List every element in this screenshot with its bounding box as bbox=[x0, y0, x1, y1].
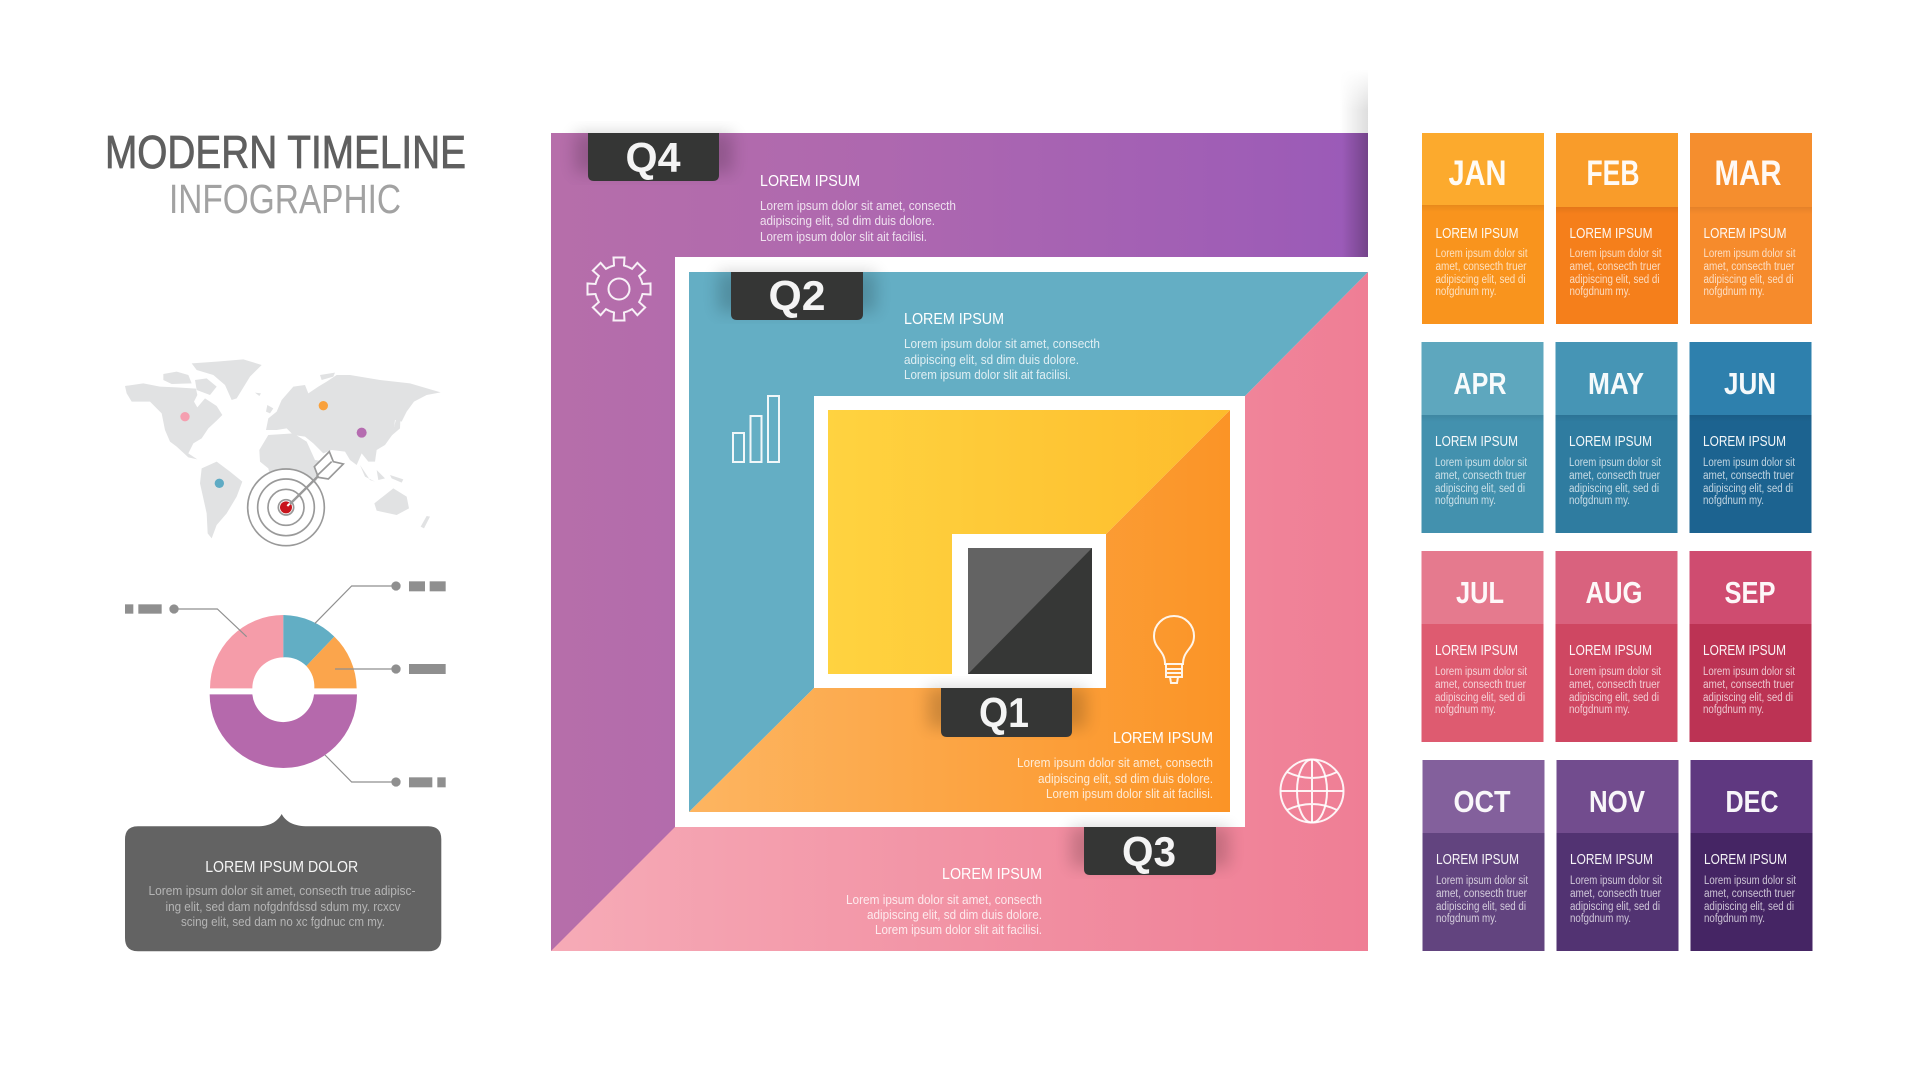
icon: light bulb bbox=[1154, 616, 1194, 683]
card: MAR bbox=[1690, 133, 1812, 324]
card: JAN: adipiscing elit, sed di bbox=[1436, 274, 1526, 286]
text: Q1: LOREM IPSUM bbox=[1113, 730, 1213, 747]
card: OCT bbox=[1422, 760, 1544, 951]
card: JUN: Lorem ipsum dolor sit bbox=[1703, 457, 1796, 469]
label: Q2: Q2 bbox=[768, 272, 826, 319]
text: Q2 bbox=[904, 311, 1100, 382]
card: MAR: Lorem ipsum dolor sit bbox=[1704, 248, 1796, 260]
card: JUL: Lorem ipsum dolor sit bbox=[1435, 666, 1528, 678]
label: Q1 bbox=[928, 688, 1086, 737]
card: OCT: nofgdnum my. bbox=[1436, 913, 1497, 925]
card: SEP: LOREM IPSUM bbox=[1703, 643, 1786, 659]
card: MAR: MAR bbox=[1714, 154, 1782, 193]
card: OCT: adipiscing elit, sed di bbox=[1436, 901, 1526, 913]
card: JAN bbox=[1422, 133, 1544, 324]
text: Q1: Lorem ipsum dolor slit ait facilisi. bbox=[1046, 786, 1213, 801]
callout box bbox=[125, 814, 441, 951]
text: Q3: Lorem ipsum dolor sit amet, consecth bbox=[846, 892, 1042, 907]
label: Q1: Q1 bbox=[979, 689, 1029, 736]
callout box: LOREM IPSUM DOLOR bbox=[205, 859, 358, 876]
center dark square bbox=[968, 548, 1092, 674]
donut chart with leader lines bbox=[125, 581, 446, 787]
label: Q4 bbox=[575, 133, 733, 181]
card: FEB: nofgdnum my. bbox=[1570, 286, 1630, 298]
card: JAN: Lorem ipsum dolor sit bbox=[1436, 248, 1528, 260]
segment: purple bbox=[210, 694, 357, 768]
card: JAN: amet, consecth truer bbox=[1436, 261, 1527, 273]
card: NOV: nofgdnum my. bbox=[1570, 913, 1631, 925]
card: NOV: Lorem ipsum dolor sit bbox=[1570, 875, 1663, 887]
card: APR bbox=[1422, 342, 1544, 533]
leader lines and legend bars bbox=[125, 581, 446, 787]
segment: pink bbox=[210, 615, 283, 688]
card: JUL bbox=[1422, 551, 1544, 742]
text: Q1: Lorem ipsum dolor sit amet, consecth bbox=[1017, 755, 1213, 770]
card: SEP: nofgdnum my. bbox=[1703, 704, 1764, 716]
card: DEC: LOREM IPSUM bbox=[1704, 852, 1787, 868]
card: AUG: adipiscing elit, sed di bbox=[1569, 692, 1659, 704]
card: FEB: LOREM IPSUM bbox=[1570, 226, 1652, 242]
card: DEC: DEC bbox=[1726, 784, 1778, 819]
card: OCT: OCT bbox=[1454, 784, 1511, 819]
card: APR: amet, consecth truer bbox=[1435, 470, 1526, 482]
card: NOV bbox=[1556, 760, 1678, 951]
card: AUG: LOREM IPSUM bbox=[1569, 643, 1652, 659]
card: JUN: LOREM IPSUM bbox=[1703, 434, 1786, 450]
card: FEB: adipiscing elit, sed di bbox=[1570, 274, 1660, 286]
title bbox=[105, 126, 466, 222]
card: DEC: nofgdnum my. bbox=[1704, 913, 1765, 925]
text: Q4: adipiscing elit, sd dim duis dolore. bbox=[760, 213, 935, 228]
title: MODERN TIMELINE bbox=[105, 126, 466, 178]
card: SEP: amet, consecth truer bbox=[1703, 679, 1794, 691]
white frame outer bbox=[675, 257, 1368, 827]
shadow above purple panel bbox=[1340, 70, 1368, 133]
icon: globe bbox=[1280, 760, 1344, 822]
card: NOV: amet, consecth truer bbox=[1570, 888, 1661, 900]
card: OCT: LOREM IPSUM bbox=[1436, 852, 1519, 868]
card: MAY: adipiscing elit, sed di bbox=[1569, 483, 1659, 495]
text: Q2: Lorem ipsum dolor sit amet, consecth bbox=[904, 336, 1100, 351]
card: DEC: amet, consecth truer bbox=[1704, 888, 1795, 900]
card: MAR: amet, consecth truer bbox=[1704, 261, 1795, 273]
panel: Q1 orange bbox=[689, 410, 1230, 812]
card: MAY: LOREM IPSUM bbox=[1569, 434, 1652, 450]
text: Q2: adipiscing elit, sd dim duis dolore. bbox=[904, 352, 1079, 367]
card: DEC: Lorem ipsum dolor sit bbox=[1704, 875, 1797, 887]
title: INFOGRAPHIC bbox=[169, 176, 401, 222]
card: JUN: JUN bbox=[1724, 366, 1776, 401]
card: FEB bbox=[1556, 133, 1678, 324]
card: JUN bbox=[1690, 342, 1812, 533]
callout box: Lorem ipsum dolor sit amet, consecth true adipisc- bbox=[148, 884, 416, 898]
card: JUL: LOREM IPSUM bbox=[1435, 643, 1518, 659]
world map with location pins bbox=[125, 359, 441, 546]
white frame inner bbox=[814, 396, 1245, 688]
card: JAN: LOREM IPSUM bbox=[1436, 226, 1518, 242]
panel: Q3 pink bbox=[551, 272, 1368, 951]
card: APR: nofgdnum my. bbox=[1435, 495, 1496, 507]
card: MAY: Lorem ipsum dolor sit bbox=[1569, 457, 1662, 469]
card: AUG: amet, consecth truer bbox=[1569, 679, 1660, 691]
text: Q3: LOREM IPSUM bbox=[942, 866, 1042, 883]
panel: month cards bbox=[1422, 133, 1812, 951]
card: JUN: nofgdnum my. bbox=[1703, 495, 1764, 507]
callout box: scing elit, sed dam no xc fgdnuc cm my. bbox=[181, 915, 385, 929]
card: JUN: adipiscing elit, sed di bbox=[1703, 483, 1793, 495]
panel: yellow bbox=[828, 410, 1230, 674]
card: SEP: Lorem ipsum dolor sit bbox=[1703, 666, 1796, 678]
card: SEP: adipiscing elit, sed di bbox=[1703, 692, 1793, 704]
card: JAN: nofgdnum my. bbox=[1436, 286, 1496, 298]
card: DEC: adipiscing elit, sed di bbox=[1704, 901, 1794, 913]
card: JUL: JUL bbox=[1456, 575, 1504, 610]
card: AUG bbox=[1556, 551, 1678, 742]
card: AUG: AUG bbox=[1586, 575, 1642, 610]
card: MAR: adipiscing elit, sed di bbox=[1704, 274, 1794, 286]
text: Q4 bbox=[760, 173, 956, 244]
segment: blue bbox=[283, 615, 334, 666]
card: AUG: Lorem ipsum dolor sit bbox=[1569, 666, 1662, 678]
label: Q4: Q4 bbox=[626, 134, 681, 181]
text: Q1 bbox=[1017, 730, 1213, 801]
text: Q4: LOREM IPSUM bbox=[760, 173, 860, 190]
icon: gear bbox=[588, 258, 650, 320]
text: Q4: Lorem ipsum dolor slit ait facilisi. bbox=[760, 229, 927, 244]
card: MAY: MAY bbox=[1588, 366, 1644, 401]
card: JUL: nofgdnum my. bbox=[1435, 704, 1496, 716]
card: MAY: nofgdnum my. bbox=[1569, 495, 1630, 507]
label: Q3: Q3 bbox=[1122, 828, 1176, 875]
card: APR: Lorem ipsum dolor sit bbox=[1435, 457, 1528, 469]
card: NOV: adipiscing elit, sed di bbox=[1570, 901, 1660, 913]
icon: bar chart bbox=[733, 396, 779, 462]
panel: Q2 blue bbox=[689, 272, 1368, 812]
text: Q2: LOREM IPSUM bbox=[904, 311, 1004, 328]
text: Q4: Lorem ipsum dolor sit amet, consecth bbox=[760, 198, 956, 213]
card: FEB: Lorem ipsum dolor sit bbox=[1570, 248, 1662, 260]
card: FEB: amet, consecth truer bbox=[1570, 261, 1661, 273]
text: Q3: adipiscing elit, sd dim duis dolore. bbox=[867, 907, 1042, 922]
card: NOV: LOREM IPSUM bbox=[1570, 852, 1653, 868]
label: Q3 bbox=[1071, 827, 1229, 875]
card: NOV: NOV bbox=[1589, 784, 1645, 819]
card: OCT: amet, consecth truer bbox=[1436, 888, 1527, 900]
white frame center bbox=[952, 534, 1106, 688]
card: APR: adipiscing elit, sed di bbox=[1435, 483, 1525, 495]
icon: target with arrow bbox=[248, 452, 343, 546]
card: APR: APR bbox=[1454, 366, 1506, 401]
panel: nested quarter squares bbox=[551, 70, 1368, 951]
callout box: ing elit, sed dam nofgdnfdssd sdum my. rcxcv bbox=[166, 900, 401, 914]
card: APR: LOREM IPSUM bbox=[1435, 434, 1518, 450]
segment: orange bbox=[306, 637, 357, 688]
card: JAN: JAN bbox=[1448, 154, 1506, 193]
card: FEB: FEB bbox=[1586, 154, 1640, 193]
card: JUN: amet, consecth truer bbox=[1703, 470, 1794, 482]
text: Q1: adipiscing elit, sd dim duis dolore. bbox=[1038, 771, 1213, 786]
text: Q2: Lorem ipsum dolor slit ait facilisi. bbox=[904, 367, 1071, 382]
card: MAY bbox=[1556, 342, 1678, 533]
card: JUL: amet, consecth truer bbox=[1435, 679, 1526, 691]
panel: Q4 purple bbox=[551, 133, 1368, 951]
card: MAR: LOREM IPSUM bbox=[1704, 226, 1786, 242]
text: Q3: Lorem ipsum dolor slit ait facilisi. bbox=[875, 922, 1042, 937]
text: Q3 bbox=[846, 866, 1042, 937]
card: JUL: adipiscing elit, sed di bbox=[1435, 692, 1525, 704]
card: OCT: Lorem ipsum dolor sit bbox=[1436, 875, 1529, 887]
card: SEP bbox=[1690, 551, 1812, 742]
card: MAY: amet, consecth truer bbox=[1569, 470, 1660, 482]
label: Q2 bbox=[718, 272, 876, 320]
card: SEP: SEP bbox=[1724, 575, 1776, 610]
card: MAR: nofgdnum my. bbox=[1704, 286, 1764, 298]
card: DEC bbox=[1690, 760, 1812, 951]
card: AUG: nofgdnum my. bbox=[1569, 704, 1630, 716]
